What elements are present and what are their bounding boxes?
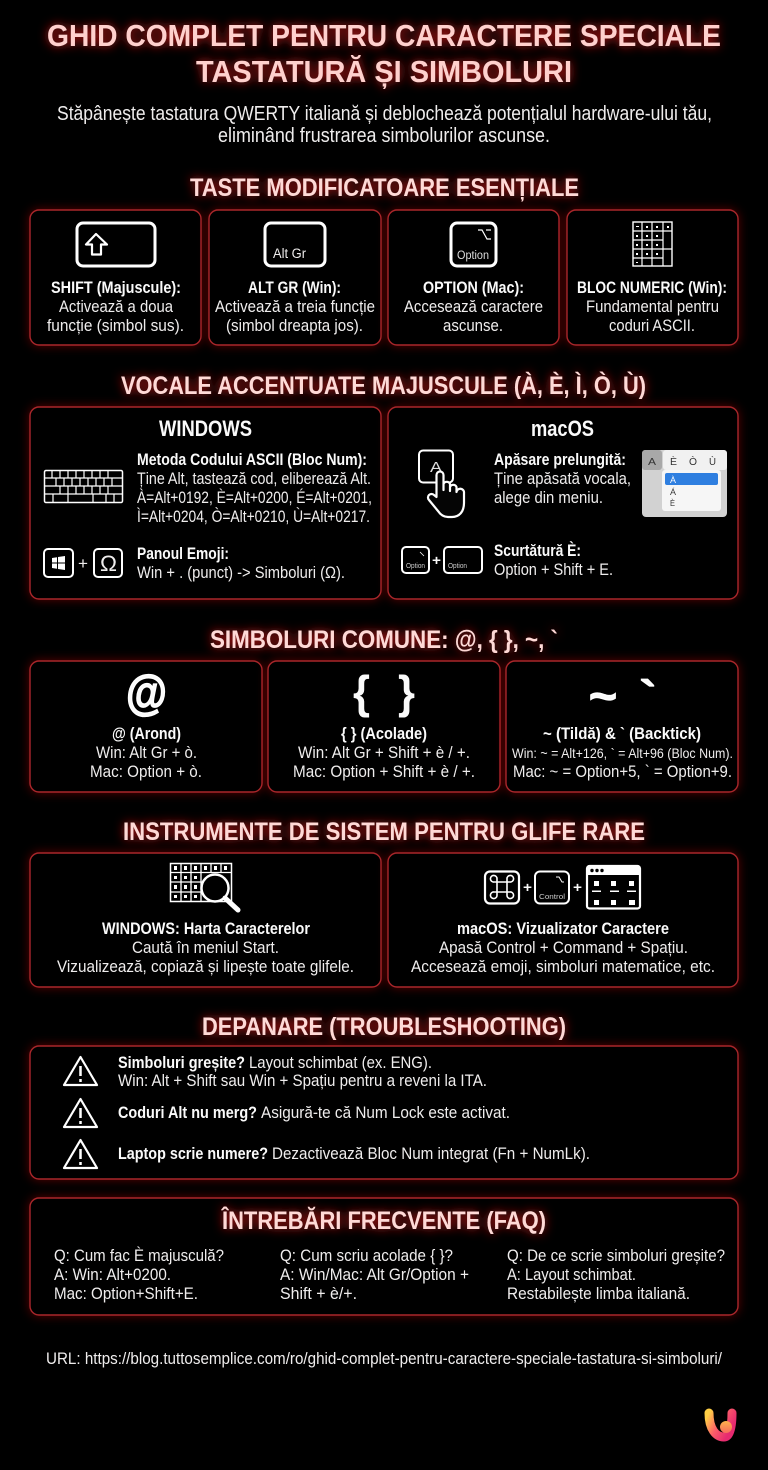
alt gr text: ALT GR (Win): [248, 279, 341, 297]
heading: accented capitals: VOCALE ACCENTUATE MAJUSCULE (À, È, Ì, Ò, Ù) [121, 370, 646, 400]
faq heading: ÎNTREBĂRI FRECVENTE (FAQ) [220, 1205, 546, 1235]
accent popup illustration: È [670, 455, 677, 468]
character map text [57, 920, 354, 976]
icon: character map with magnifier [170, 863, 238, 910]
faq column 1: Q: Cum fac È majusculă? [54, 1246, 224, 1265]
title: GHID COMPLET PENTRU CARACTERE SPECIALE [47, 18, 721, 53]
icon: key press hand [419, 450, 464, 517]
option text [404, 279, 543, 335]
glyph: tilde and backtick [589, 672, 656, 721]
icon: warning 3 [64, 1140, 97, 1168]
option text: Accesează caractere [404, 298, 543, 316]
emoji panel text: Panoul Emoji: [137, 545, 229, 563]
troubleshooting item 1: Simboluri greșite? [118, 1054, 245, 1072]
subtitle: eliminând frustrarea simbolurilor ascunse. [218, 125, 550, 147]
faq column 2: A: Win/Mac: Alt Gr/Option + [280, 1266, 469, 1284]
braces text: Win: Alt Gr + Shift + è / +. [298, 744, 470, 762]
at text [90, 725, 202, 781]
accent popup illustration: Á [670, 488, 677, 497]
ascii method text: Metoda Codului ASCII (Bloc Num): [137, 451, 367, 469]
icon: option key: Option [457, 250, 489, 262]
icon: command control viewer: + [573, 879, 582, 895]
faq column 2: Shift + è/+. [280, 1285, 357, 1303]
emoji panel text [137, 545, 345, 582]
option text: ascunse. [443, 317, 503, 335]
icon: warning 1 [64, 1057, 97, 1085]
title [47, 18, 721, 89]
option text: OPTION (Mac): [423, 279, 524, 297]
icon: numeric keypad [633, 222, 672, 266]
glyph: braces: } [398, 666, 415, 718]
braces text: { } (Acolade) [341, 725, 427, 743]
numeric block text: BLOC NUMERIC (Win): [577, 279, 727, 297]
braces text [293, 725, 475, 781]
at text: Win: Alt Gr + ò. [96, 744, 197, 762]
icon: shift key [77, 223, 155, 266]
numeric block text [577, 279, 727, 335]
tilde text [512, 725, 733, 781]
accent popup illustration [642, 450, 727, 517]
icon: win plus omega: Ω [100, 551, 117, 576]
panel: option [388, 210, 559, 345]
troubleshooting item 1: Win: Alt + Shift sau Win + Spațiu pentru a reveni la ITA. [118, 1072, 487, 1090]
windows heading: WINDOWS [159, 416, 252, 441]
faq column 3: Q: De ce scrie simboluri greșite? [507, 1247, 725, 1265]
at text: @ (Arond) [112, 725, 181, 743]
faq column 2: Q: Cum scriu acolade { }? [280, 1247, 453, 1265]
shortcut text [494, 541, 613, 579]
shift text: funcție (simbol sus). [47, 317, 184, 335]
glyph: at: @ [126, 667, 167, 720]
faq column 2 [280, 1247, 469, 1303]
character viewer text: Accesează emoji, simboluri matematice, etc. [411, 958, 715, 976]
shortcut text: Scurtătură È: [494, 541, 581, 560]
faq column 1 [54, 1246, 224, 1303]
troubleshooting item 3 [118, 1145, 590, 1163]
faq column 1: Mac: Option+Shift+E. [54, 1285, 198, 1303]
troubleshooting item 1 [118, 1054, 487, 1090]
panel: tilde and backtick [506, 661, 738, 792]
character viewer text: macOS: Vizualizator Caractere [457, 920, 669, 938]
accent popup illustration: Ò [689, 455, 697, 468]
heading: common symbols: SIMBOLURI COMUNE: @, { }, ~, ` [210, 626, 558, 654]
icon: key press hand: A [430, 459, 442, 476]
long press text: Ține apăsată vocala, [494, 470, 631, 488]
accent popup illustration: Ù [709, 455, 716, 468]
troubleshooting item 2 [118, 1104, 510, 1122]
heading: essential modifier keys: TASTE MODIFICATOARE ESENȚIALE [190, 174, 579, 202]
shortcut text: Option + Shift + E. [494, 561, 613, 579]
character map text: Vizualizează, copiază și lipește toate glifele. [57, 958, 354, 976]
panel: at sign [30, 661, 262, 792]
panel: macos character viewer [388, 853, 738, 987]
heading: troubleshooting: DEPANARE (TROUBLESHOOTING) [202, 1013, 566, 1041]
numeric block text: coduri ASCII. [609, 317, 695, 335]
icon: command control viewer: Control [539, 892, 565, 901]
tilde text: Win: ~ = Alt+126, ` = Alt+96 (Bloc Num). [512, 745, 733, 761]
icon: keyboard [44, 470, 123, 502]
icon: warning 2 [64, 1099, 97, 1127]
icon: option plus option [402, 547, 482, 573]
long press text [494, 451, 631, 507]
glyph: braces: { [353, 666, 370, 718]
panel: braces [268, 661, 500, 792]
accent popup illustration: A [648, 457, 656, 468]
glyph: tilde and backtick: ` [640, 672, 656, 721]
panel: alt gr [209, 210, 381, 345]
title: TASTATURĂ ȘI SIMBOLURI [196, 54, 572, 89]
panel: troubleshooting [30, 1046, 738, 1179]
macos heading: macOS [531, 416, 594, 441]
numeric block text: Fundamental pentru [586, 298, 719, 316]
faq column 1: A: Win: Alt+0200. [54, 1266, 171, 1284]
source url: URL: https://blog.tuttosemplice.com/ro/ghid-complet-pentru-caractere-speciale-tastatura-si-simboluri/ [46, 1350, 722, 1368]
troubleshooting item 2: Asigură-te că Num Lock este activat. [261, 1104, 510, 1122]
faq column 3: Restabilește limba italiană. [507, 1285, 690, 1303]
icon: command control viewer: + [523, 879, 532, 895]
icon: option plus option: Option [406, 563, 425, 570]
heading: system tools: INSTRUMENTE DE SISTEM PENTRU GLIFE RARE [123, 818, 645, 846]
troubleshooting item 1: Layout schimbat (ex. ENG). [249, 1054, 432, 1072]
faq column 3: A: Layout schimbat. [507, 1266, 636, 1284]
icon: option plus option: + [432, 552, 441, 568]
character viewer text: Apasă Control + Command + Spațiu. [439, 939, 688, 957]
icon: option plus option: Option [448, 563, 467, 570]
icon: command control viewer [485, 866, 640, 908]
panel: macos accents [388, 407, 738, 599]
alt gr text: (simbol dreapta jos). [226, 317, 363, 335]
character map text: WINDOWS: Harta Caracterelor [102, 920, 310, 938]
tilde text: Mac: ~ = Option+5, ` = Option+9. [513, 763, 732, 781]
character viewer text [411, 920, 715, 976]
glyph: braces [353, 666, 415, 718]
icon: alt gr key: Alt Gr [273, 246, 306, 261]
panel: windows character map [30, 853, 381, 987]
ascii method text: Ține Alt, tastează cod, eliberează Alt. [137, 470, 371, 488]
troubleshooting item 3: Laptop scrie numere? [118, 1145, 268, 1163]
icon: win plus omega: + [78, 554, 88, 573]
ascii method text [137, 451, 372, 526]
accent popup illustration: È [670, 499, 675, 508]
icon: option key [451, 223, 496, 266]
alt gr text [215, 279, 375, 335]
accent popup illustration: À [670, 476, 677, 485]
icon: alt gr key [265, 223, 325, 266]
panel: windows accents [30, 407, 381, 599]
shift text [47, 279, 184, 335]
glyph: tilde and backtick: ~ [589, 672, 617, 721]
long press text: Apăsare prelungită: [494, 451, 626, 469]
emoji panel text: Win + . (punct) -> Simboluri (Ω). [137, 564, 345, 582]
shift text: Activează a doua [59, 298, 174, 316]
panel: numeric block [567, 210, 738, 345]
ascii method text: Ì=Alt+0204, Ò=Alt+0210, Ù=Alt+0217. [137, 507, 370, 526]
troubleshooting item 2: Coduri Alt nu merg? [118, 1104, 257, 1122]
troubleshooting item 3: Dezactivează Bloc Num integrat (Fn + NumLk). [272, 1145, 590, 1163]
braces text: Mac: Option + Shift + è / +. [293, 763, 475, 781]
ascii method text: À=Alt+0192, È=Alt+0200, É=Alt+0201, [137, 488, 372, 507]
panel: faq [30, 1198, 738, 1315]
faq column 3 [507, 1247, 725, 1303]
logo [709, 1413, 732, 1437]
alt gr text: Activează a treia funcție [215, 298, 375, 316]
subtitle [57, 103, 712, 147]
icon: win plus omega [44, 549, 122, 577]
tilde text: ~ (Tildă) & ` (Backtick) [543, 725, 701, 743]
at text: Mac: Option + ò. [90, 763, 202, 781]
long press text: alege din meniu. [494, 489, 603, 507]
panel: shift [30, 210, 201, 345]
character map text: Caută în meniul Start. [132, 939, 279, 957]
shift text: SHIFT (Majuscule): [51, 279, 181, 297]
